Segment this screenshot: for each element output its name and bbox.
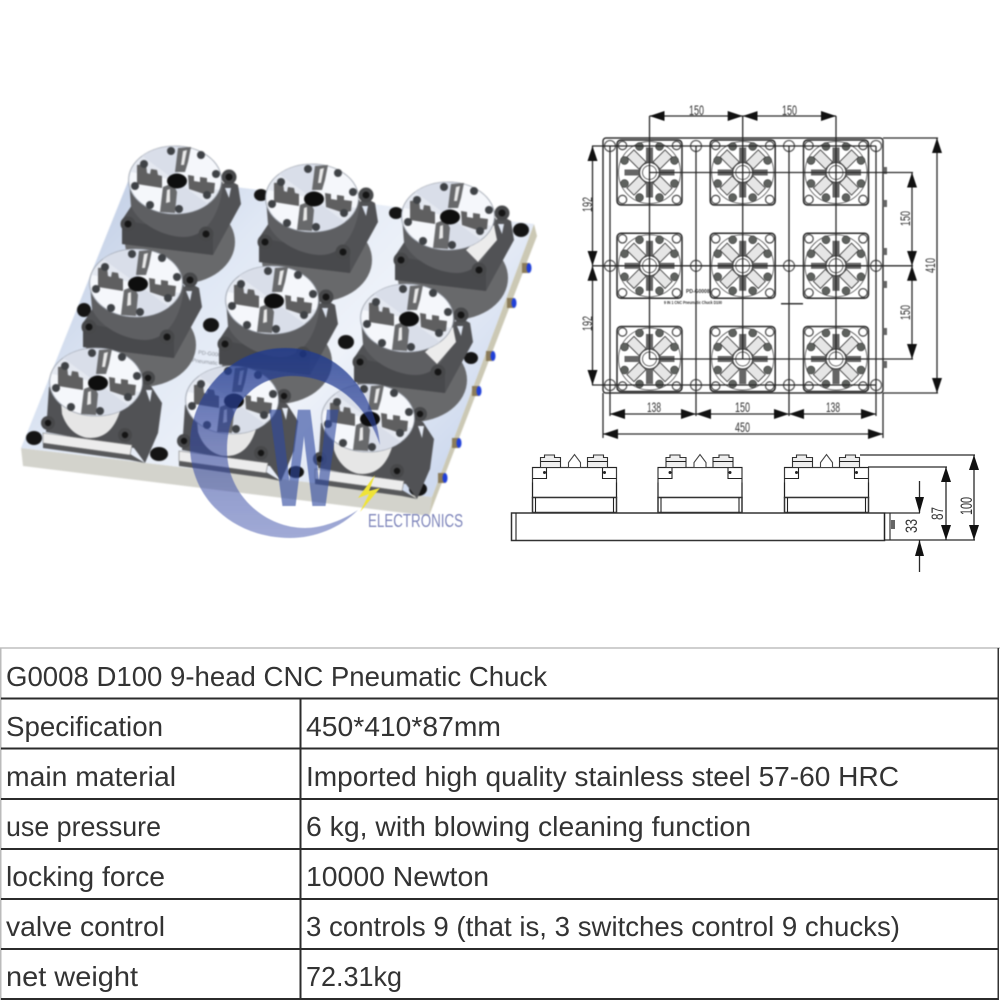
technical drawing: top view (579, 102, 938, 438)
row: specification: 450*410*87mm (306, 711, 501, 742)
base plate (512, 513, 895, 540)
plate front edge (21, 448, 432, 516)
dimension labels: 138 (647, 399, 661, 415)
chuck row 2 (82, 249, 473, 393)
logo crescent C (190, 348, 380, 538)
mounting hole rings (604, 140, 882, 390)
plate outline (603, 138, 883, 393)
row: locking force: 10000 Newton (306, 861, 489, 892)
height dimensions: 87 (928, 507, 947, 520)
engraved plate text: 9-head CNC Pneumatic Chuck (160, 354, 235, 369)
table grid (0, 647, 1000, 1000)
engraved part label: PD-G0008 (686, 289, 710, 295)
dimension labels: 150 (735, 399, 750, 415)
product render: 9-head pneumatic chuck plate (21, 146, 537, 516)
row: main material (6, 761, 899, 792)
plate side fittings (883, 167, 887, 368)
row: locking force (6, 861, 489, 892)
row: use pressure: use pressure (6, 811, 161, 842)
row: main material: Imported high quality stainless steel 57-60 HRC (306, 761, 899, 792)
logo wordmark: ELECTRONICS (368, 511, 463, 531)
row: use pressure (6, 811, 751, 842)
dimension arrows (592, 116, 937, 434)
dimension labels: 150 (897, 211, 913, 226)
technical drawing: side view (512, 454, 976, 572)
row: valve control: 3 controls 9 (that is, 3 switches control 9 chucks) (306, 911, 900, 942)
specification table (0, 647, 1000, 1000)
height dimensions: 33 (902, 519, 921, 533)
watermark logo: CW Electronics (190, 348, 463, 538)
dimension extension lines (592, 116, 938, 438)
dimension labels: 138 (826, 399, 840, 415)
row: use pressure: 6 kg, with blowing cleaning function (306, 811, 751, 842)
row: net weight: net weight (6, 961, 138, 992)
chuck shadows (86, 200, 508, 422)
chuck grid (617, 140, 868, 392)
dimension labels: 192 (579, 316, 595, 331)
chuck row 1 (120, 146, 514, 291)
table title: G0008 D100 9-head CNC Pneumatic Chuck (6, 661, 548, 692)
plate top surface (21, 174, 534, 497)
row: net weight: 72.31kg (306, 961, 402, 992)
blue air fittings (438, 263, 532, 483)
row: valve control: valve control (6, 911, 165, 942)
dimension labels: 150 (897, 305, 913, 320)
dimension labels: 192 (579, 197, 595, 212)
row: specification (6, 711, 501, 742)
logo lightning bolt (358, 475, 380, 512)
dimension labels: 450 (735, 419, 750, 435)
engraved product name: 9 IN 1 CNC Pneumatic Chuck D100 (664, 300, 722, 305)
plate right edge (429, 224, 537, 516)
height dimensions (860, 455, 976, 572)
chuck row 3 (41, 348, 434, 499)
dimension labels: 410 (922, 258, 938, 273)
dimension labels (579, 102, 938, 435)
height dimensions: 100 (957, 497, 976, 515)
dimension labels: 150 (689, 102, 704, 118)
engraved mark (781, 303, 803, 304)
row: specification: Specification (6, 711, 163, 742)
dimension labels: 150 (782, 102, 797, 118)
chuck profiles (532, 454, 868, 512)
mounting holes (26, 189, 529, 496)
logo letter W: W (270, 382, 338, 535)
row: net weight (6, 961, 402, 992)
row: main material: main material (6, 761, 176, 792)
engraved plate text: PD-G0008 (198, 350, 224, 359)
row: locking force: locking force (6, 861, 165, 892)
row: valve control (6, 911, 900, 942)
